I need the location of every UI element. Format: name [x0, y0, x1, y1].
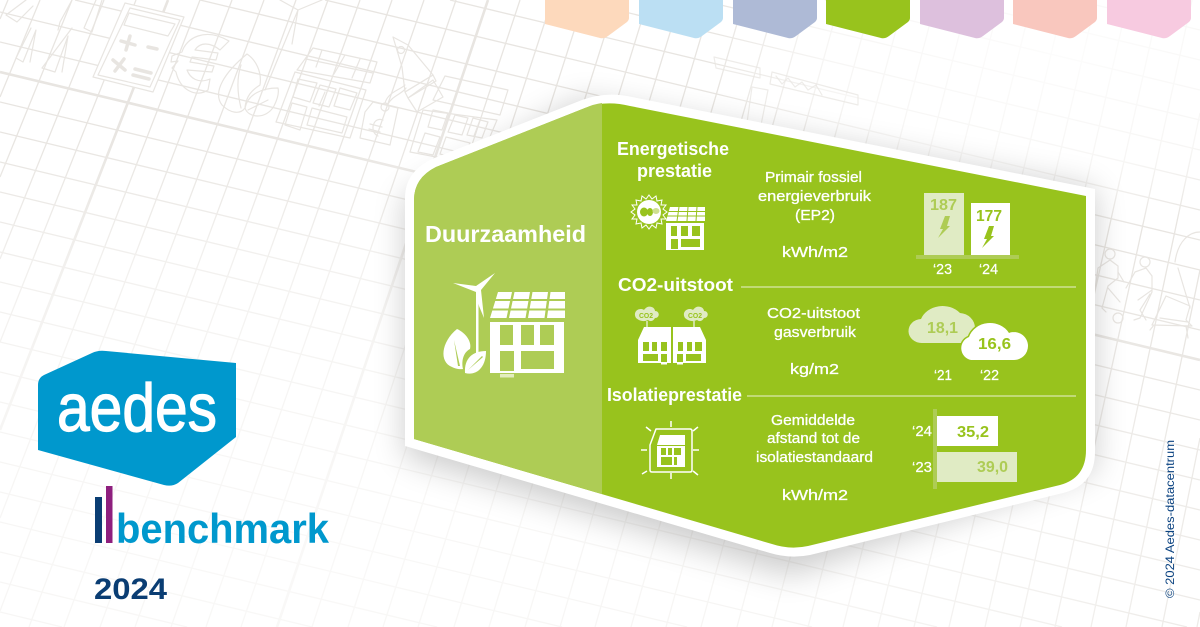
- background line art: leaves and turbine: [219, 0, 322, 116]
- icon: wind turbine, leaves and solar house: [443, 273, 566, 378]
- tab: slate blue: [733, 0, 817, 38]
- background line art: calculator: [93, 3, 184, 92]
- background line art: second house: [410, 76, 508, 165]
- panel white border: [405, 95, 1095, 557]
- axis labels: ‘23: [933, 262, 952, 278]
- text: gemiddelde afstand tot de isolatiestandaard: Gemiddelde: [771, 412, 855, 429]
- axis labels: ‘21: [934, 368, 952, 384]
- text: primair fossiel energieverbruik: kWh/m2: [782, 244, 848, 261]
- background line art: euro sign: [171, 35, 229, 93]
- heading: Duurzaamheid: Duurzaamheid: [425, 221, 586, 247]
- background line art: price tag with euro: [360, 85, 406, 145]
- text: CO2-uitstoot gasverbruik: [767, 305, 861, 378]
- bar: 2024 value 177: 177: [976, 208, 1002, 225]
- icon: houses with CO2 clouds: [635, 307, 708, 364]
- background line art: people with ball and bench: [1095, 232, 1200, 338]
- tab: green active: [826, 0, 910, 38]
- axis labels: ‘22: [980, 368, 999, 384]
- axis labels: ‘24: [912, 424, 932, 440]
- section: Energetische prestatie: [617, 138, 1019, 278]
- text: CO2-uitstoot gasverbruik: gasverbruik: [774, 324, 857, 341]
- cloud: 2021 value 18,1: 18,1: [927, 320, 958, 337]
- tab: salmon: [1013, 0, 1097, 38]
- text: gemiddelde afstand tot de isolatiestandaard: [756, 412, 873, 504]
- tab: light blue: [639, 0, 723, 38]
- logo: benchmark: benchmark: [116, 505, 330, 552]
- text: gemiddelde afstand tot de isolatiestandaard: kWh/m2: [782, 487, 848, 504]
- panel green body: [414, 103, 1086, 548]
- icon: sun and solar house: [631, 195, 705, 250]
- panel shadow: [405, 100, 1095, 575]
- heading: CO2-uitstoot: CO2-uitstoot: [618, 274, 733, 295]
- panel light left column: [414, 103, 602, 494]
- background line art: paint brush: [393, 37, 443, 112]
- text: primair fossiel energieverbruik: energieverbruik: [758, 188, 872, 205]
- icon: houses with CO2 clouds: CO2: [639, 311, 653, 320]
- tab: lilac: [920, 0, 1004, 38]
- bar: 2023 value 187: 187: [930, 197, 957, 214]
- text: primair fossiel energieverbruik: Primair fossiel: [765, 169, 862, 186]
- axis labels: [912, 424, 932, 476]
- bar: 2023 value 39,0: 39,0: [977, 459, 1008, 476]
- copyright: © 2024 Aedes-datacentrum: [1163, 440, 1177, 598]
- text: CO2-uitstoot gasverbruik: CO2-uitstoot: [767, 305, 861, 322]
- heading: Energetische prestatie: Energetische: [617, 138, 729, 159]
- background line art: people at top left: [6, 0, 102, 72]
- chart: CO2 clouds: [908, 306, 1028, 384]
- bar: 2024 value 35,2: 35,2: [957, 424, 989, 441]
- heading: Energetische prestatie: [617, 138, 729, 181]
- icon: insulated house: [641, 421, 699, 479]
- tab: peach: [545, 0, 629, 38]
- text: gemiddelde afstand tot de isolatiestandaard: afstand tot de: [767, 430, 860, 447]
- panel: Duurzaamheid: [405, 95, 1095, 557]
- cloud: 2022 value 16,6: 16,6: [978, 336, 1011, 353]
- background line art: house with solar panels: [276, 48, 377, 138]
- logo: aedes: aedes: [57, 370, 217, 446]
- text: primair fossiel energieverbruik: [758, 169, 872, 261]
- background line art: construction crane: [714, 57, 858, 130]
- chart: EP2 bars: [916, 193, 1019, 278]
- chart: insulation bars: [912, 409, 1017, 489]
- section: CO2-uitstoot: [618, 274, 1076, 384]
- icon: houses with CO2 clouds: CO2: [688, 311, 702, 320]
- year: 2024: 2024: [94, 573, 167, 606]
- axis labels: [934, 368, 999, 384]
- axis labels: [933, 262, 998, 278]
- text: gemiddelde afstand tot de isolatiestandaard: isolatiestandaard: [756, 449, 873, 466]
- logo: aedes: [38, 351, 236, 486]
- tab: pink: [1107, 0, 1191, 38]
- text: primair fossiel energieverbruik: (EP2): [795, 207, 835, 224]
- top navigation tabs: [545, 0, 1191, 38]
- axis labels: ‘24: [979, 262, 998, 278]
- axis labels: ‘23: [912, 460, 932, 476]
- text: CO2-uitstoot gasverbruik: kg/m2: [790, 361, 839, 378]
- heading: Isolatieprestatie: Isolatieprestatie: [607, 384, 742, 405]
- logo: benchmark: [95, 486, 330, 552]
- heading: Energetische prestatie: prestatie: [637, 160, 712, 181]
- section: Isolatieprestatie: [607, 384, 1076, 504]
